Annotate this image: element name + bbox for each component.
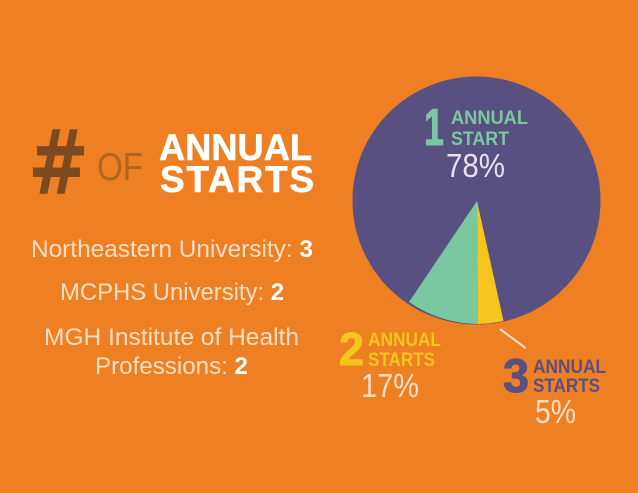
label: 2 annual starts 17%	[339, 323, 441, 404]
pie chart	[352, 76, 600, 324]
leader line to 3 annual starts	[500, 329, 526, 348]
word: starts: STARTS	[160, 159, 314, 200]
Northeastern University: Northeastern University: 3	[31, 236, 313, 263]
percent 17: 17%	[361, 367, 419, 404]
percent 78: 78%	[446, 147, 505, 184]
hash symbol: #	[28, 111, 89, 216]
label: 1 annual start 78%	[424, 99, 528, 184]
slice: 1 annual start 78%	[352, 76, 600, 324]
start: START	[451, 128, 509, 150]
percent 5: 5%	[535, 393, 576, 430]
annual: ANNUAL	[368, 330, 441, 351]
text block: university list	[31, 236, 313, 380]
MGH Institute of Health: MGH Institute of Health	[44, 324, 299, 351]
slice: 3 annual starts 5%	[477, 201, 504, 324]
word: of: OF	[97, 146, 143, 189]
numeral 1: 1	[424, 99, 444, 157]
starts: STARTS	[533, 376, 600, 397]
annual: ANNUAL	[451, 107, 528, 129]
title: # of annual starts	[28, 111, 314, 216]
MCPHS University: MCPHS University: 2	[60, 279, 284, 306]
annual: ANNUAL	[533, 357, 606, 378]
word: annual: ANNUAL	[159, 127, 312, 168]
numeral 2: 2	[339, 323, 364, 375]
label: 3 annual starts 5%	[503, 349, 606, 430]
numeral 3: 3	[503, 349, 529, 402]
Professions: Professions: 2	[95, 353, 248, 380]
slice: 2 annual starts 17%	[409, 201, 478, 324]
starts: STARTS	[368, 350, 435, 371]
